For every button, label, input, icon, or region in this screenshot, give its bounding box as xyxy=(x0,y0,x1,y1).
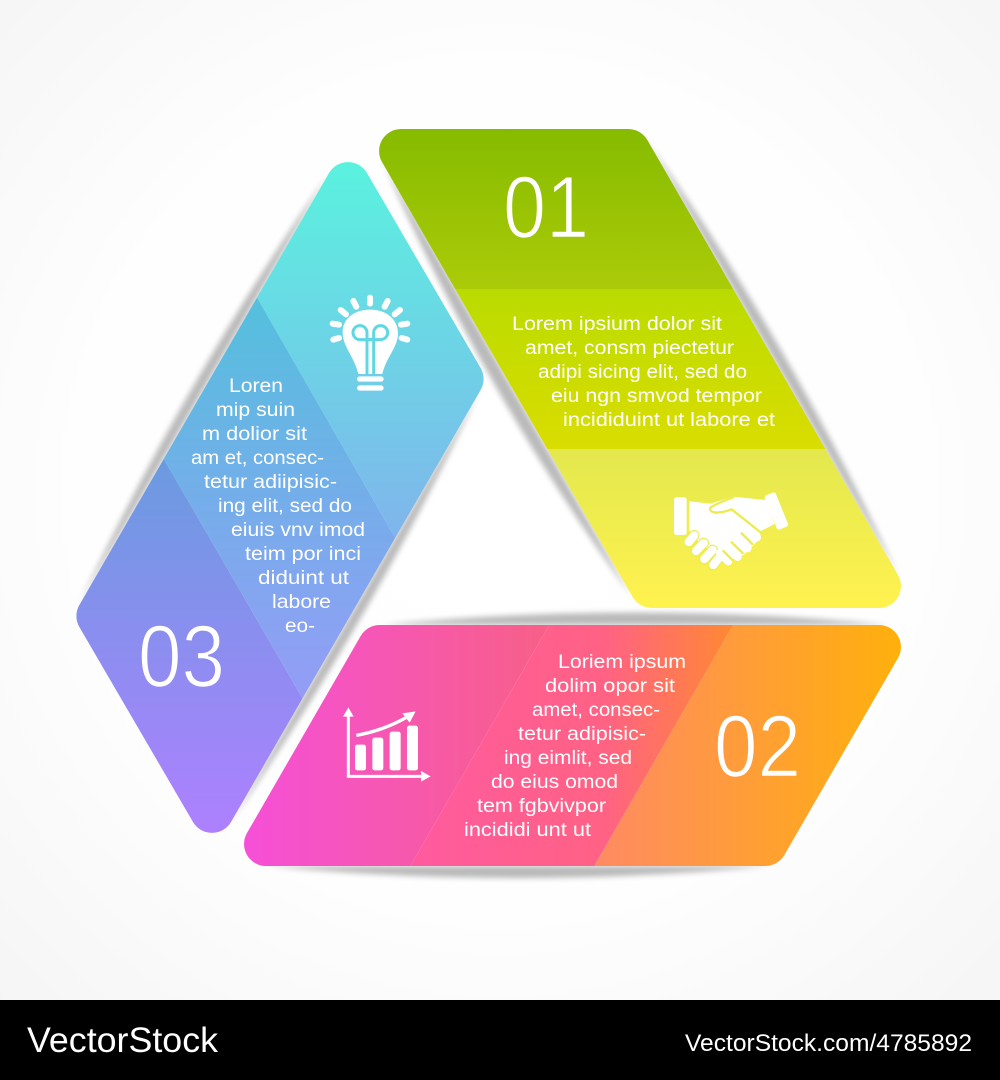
panel 01 text: adipi sicing elit, sed do xyxy=(538,361,747,383)
panel 03 text: mip suin xyxy=(216,399,295,421)
panel 03 text: labore xyxy=(272,591,331,613)
panel 02 text: amet, consec- xyxy=(532,699,660,721)
panel 01 text: incididuint ut labore et xyxy=(563,409,776,431)
panel 02 text: incididi unt ut xyxy=(464,819,592,841)
icon: handshake xyxy=(674,492,789,565)
number 01: 01 xyxy=(503,158,589,256)
panel 01 text: amet, consm piectetur xyxy=(525,337,735,359)
panel 03 text: tetur adiipisic- xyxy=(204,471,337,493)
panel 02: pink to orange xyxy=(244,625,901,866)
panel 02 bands xyxy=(244,625,901,866)
panel 03: turquoise to violet xyxy=(76,162,484,833)
panel 01 text: eiu ngn smvod tempor xyxy=(551,385,763,407)
panel 03 text: teim por inci xyxy=(245,543,361,565)
footer bar xyxy=(0,1000,1000,1080)
panel 02 text: dolim opor sit xyxy=(545,675,676,697)
icon: light bulb xyxy=(333,298,407,391)
footer url: VectorStock.com/4785892 xyxy=(685,1030,972,1057)
panel 03 text: m dolior sit xyxy=(202,423,308,445)
number 02: 02 xyxy=(714,696,801,796)
footer brand: VectorStock xyxy=(27,1021,219,1060)
panel 02 text: tem fgbvivpor xyxy=(477,795,607,817)
panel 03 text: ing elit, sed do xyxy=(218,495,352,517)
panel 02 text: do eius omod xyxy=(491,771,618,793)
panel 03 text: Loren xyxy=(229,375,283,397)
panel 01 text xyxy=(512,313,776,431)
panel 03 text: diduint ut xyxy=(258,567,350,589)
panel 03 text: am et, consec- xyxy=(191,447,324,469)
panel 03 text xyxy=(191,375,365,637)
panel 02 text: Loriem ipsum xyxy=(558,651,686,673)
panel 03 text: eiuis vnv imod xyxy=(231,519,365,541)
panel 01 text: Lorem ipsium dolor sit xyxy=(512,313,723,335)
panel 02 text: ing eimlit, sed xyxy=(504,747,632,769)
panel 02 text: tetur adipisic- xyxy=(518,723,646,745)
panel 03 bands xyxy=(76,162,484,833)
panel 02 text xyxy=(464,651,686,841)
icon: growth chart xyxy=(343,707,431,782)
panel 01: green xyxy=(379,129,901,608)
panel 01 shape xyxy=(379,129,901,608)
panel 03 text: eo- xyxy=(285,615,315,637)
number 03: 03 xyxy=(138,606,225,706)
